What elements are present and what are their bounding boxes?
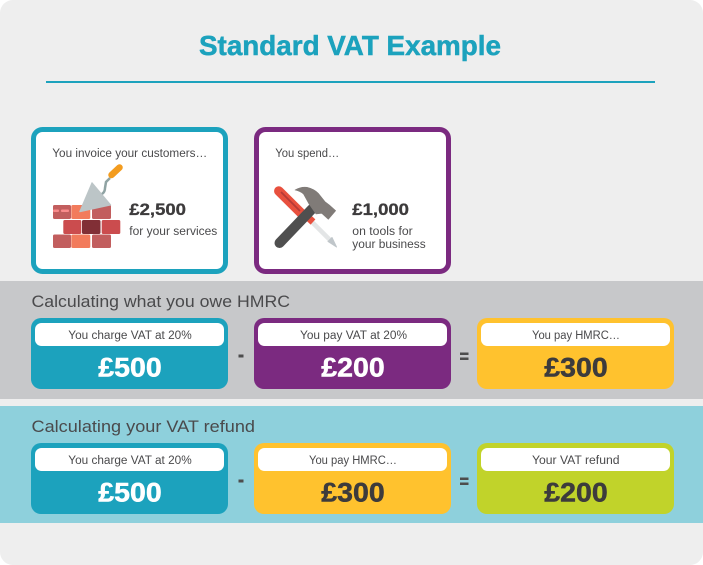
title: Standard VAT Example: [199, 30, 501, 61]
heading: VAT refund: Calculating your VAT refund: [32, 417, 255, 436]
panel: calculating what you owe HMRC: [0, 281, 703, 399]
panel: spend card: You spend…: [275, 148, 339, 160]
box: your VAT refund: [477, 443, 674, 514]
box: you charge VAT: £500: [98, 352, 162, 382]
panel: spend card: [256, 130, 448, 272]
box: you pay HMRC: You pay HMRC…: [309, 455, 397, 467]
box: your VAT refund: £200: [544, 478, 608, 508]
equals sign: [460, 352, 468, 360]
box: you charge VAT: £500: [98, 478, 162, 508]
box: you pay VAT: £200: [321, 352, 385, 382]
panel: invoice card: You invoice your customers…: [52, 148, 207, 160]
panel: spend card: on tools for: [352, 226, 413, 238]
box: you charge VAT: [31, 443, 228, 514]
panel: calculating your VAT refund: [0, 406, 703, 523]
box: you pay HMRC: [254, 443, 451, 514]
panel: invoice card: for your services: [129, 226, 218, 238]
box: you pay HMRC: You pay HMRC…: [532, 330, 620, 342]
icon: hammer and screwdriver: [279, 187, 336, 247]
box: you pay HMRC: £300: [321, 478, 385, 508]
panel: invoice card: £2,500: [129, 200, 186, 219]
box: your VAT refund: Your VAT refund: [532, 455, 620, 467]
icon: bricks and trowel: [53, 168, 120, 248]
heading: owe HMRC: Calculating what you owe HMRC: [32, 292, 290, 311]
box: you pay HMRC: [477, 318, 674, 389]
minus sign: [238, 354, 244, 358]
minus sign: [238, 480, 244, 482]
box: you pay HMRC: £300: [544, 352, 608, 382]
box: you charge VAT: You charge VAT at 20%: [68, 330, 192, 342]
panel: invoice card: [34, 130, 226, 272]
equals sign: [460, 478, 468, 485]
panel: spend card: your business: [352, 239, 426, 251]
box: you pay VAT: [254, 318, 451, 389]
box: you pay VAT: You pay VAT at 20%: [300, 330, 407, 342]
box: you charge VAT: [31, 318, 228, 389]
box: you charge VAT: You charge VAT at 20%: [68, 455, 192, 467]
panel: spend card: £1,000: [352, 200, 409, 219]
